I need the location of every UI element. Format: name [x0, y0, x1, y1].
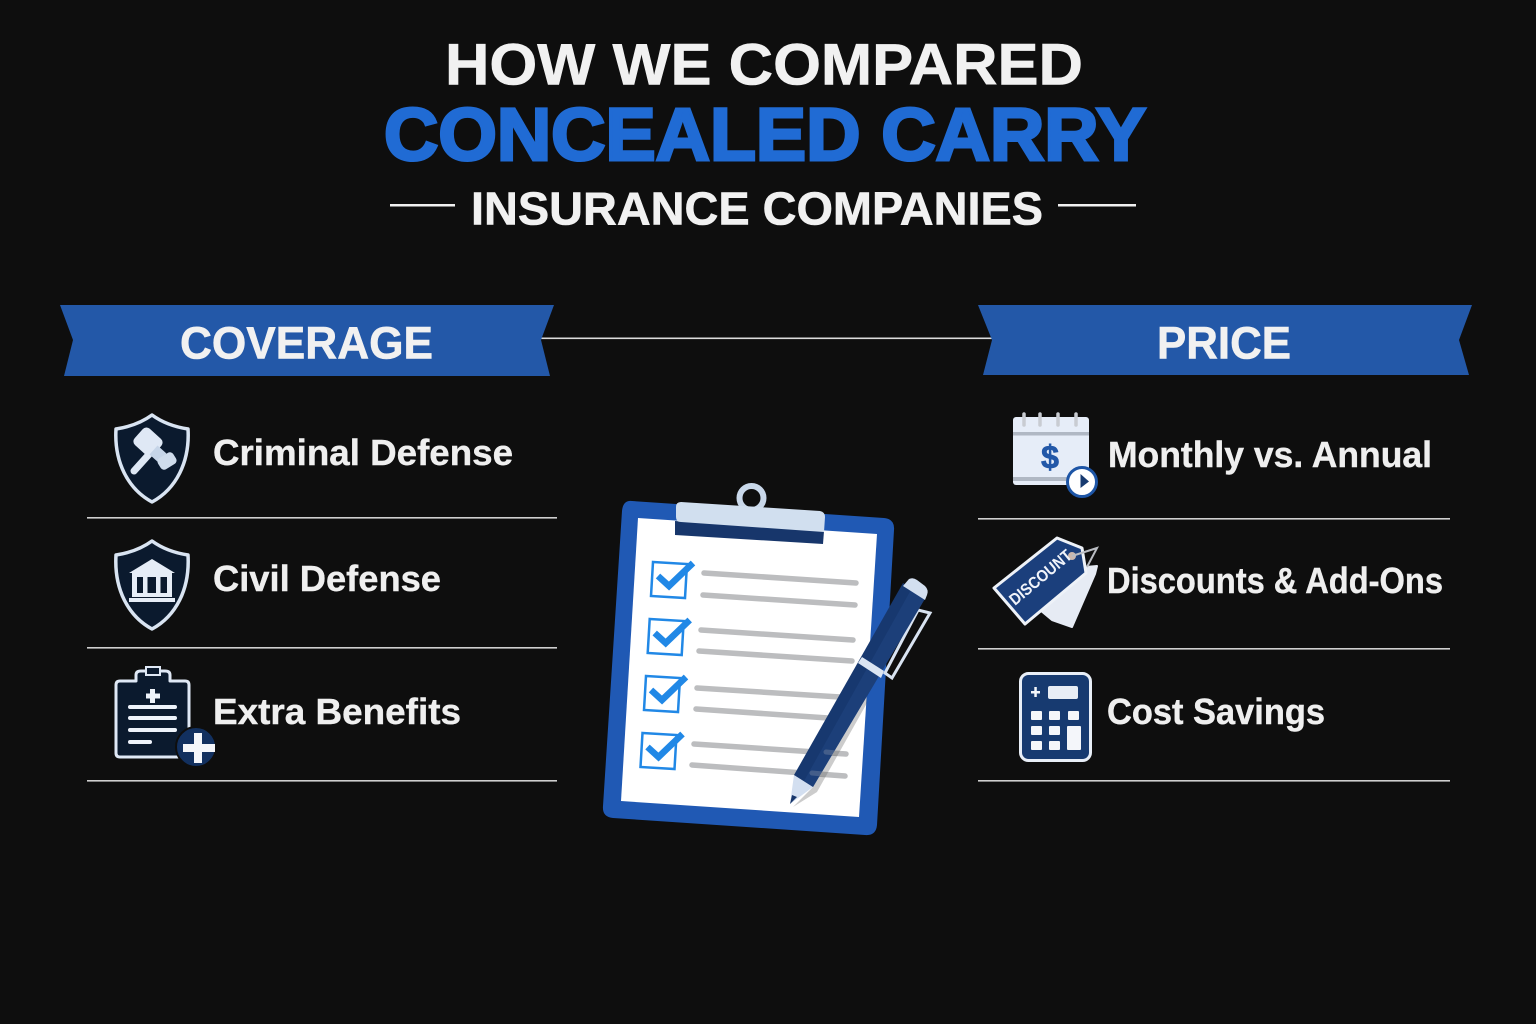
item: discounts and add-ons [994, 538, 1443, 627]
label: civil defense: Civil Defense [213, 558, 441, 599]
item: cost savings [1020, 674, 1325, 760]
icon: shield with gavel [116, 415, 188, 502]
clipboard clip [675, 486, 825, 544]
icon: calendar with dollar and clock: $ [1041, 439, 1059, 475]
label: monthly vs annual: Monthly vs. Annual [1108, 434, 1432, 475]
icon: discount tag: DISCOUNT [1006, 546, 1076, 609]
clipboard board [603, 501, 894, 835]
item: monthly vs annual [1013, 414, 1432, 496]
item: civil defense [116, 541, 441, 629]
clipboard paper [621, 518, 877, 817]
label: discounts and add-ons: Discounts & Add-Ons [1107, 560, 1443, 601]
title: CONCEALED CARRY [384, 93, 1146, 176]
icon: discount tag [994, 538, 1097, 627]
heading: price banner [978, 305, 1472, 375]
heading: price banner: PRICE [1157, 318, 1291, 368]
heading: coverage banner: COVERAGE [180, 318, 433, 368]
icon: calculator [1020, 674, 1090, 760]
checklist rows [640, 562, 856, 776]
item: extra benefits [116, 667, 461, 767]
illustration: clipboard with checklist and pen [603, 486, 930, 835]
icon: clipboard with plus [116, 667, 216, 767]
label: extra benefits: Extra Benefits [213, 691, 461, 732]
pen [790, 578, 930, 807]
panel: coverage [60, 305, 557, 782]
icon: calendar with dollar and clock [1013, 414, 1096, 496]
icon: shield with courthouse [116, 541, 188, 629]
item: criminal defense [116, 415, 513, 502]
title: INSURANCE COMPANIES [471, 182, 1043, 234]
label: cost savings: Cost Savings [1107, 691, 1325, 732]
title: HOW WE COMPARED [445, 32, 1083, 98]
heading: coverage banner [60, 305, 554, 376]
title [384, 32, 1146, 234]
label: criminal defense: Criminal Defense [213, 432, 513, 473]
panel: price [978, 305, 1472, 782]
